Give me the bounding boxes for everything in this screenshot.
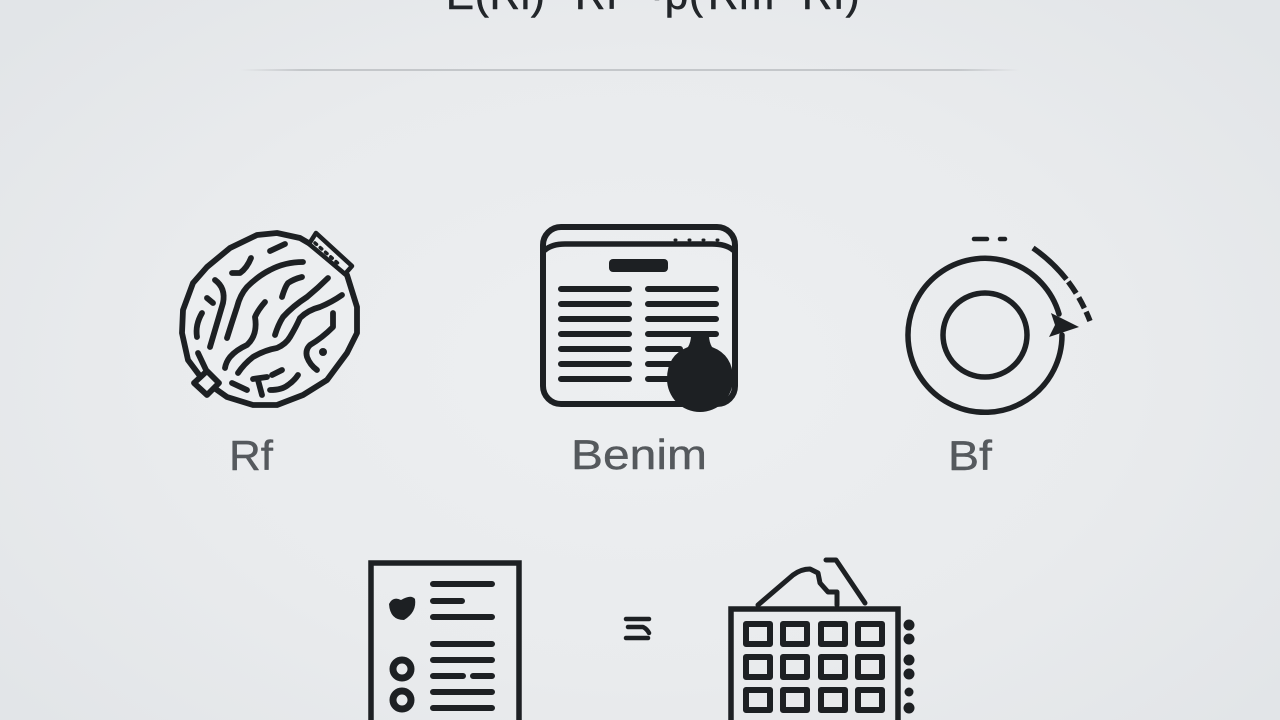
- icon: calendar building with mountain: [731, 560, 914, 720]
- label: Benim: Benim: [571, 431, 707, 478]
- icon: equals-like symbol: [626, 619, 649, 638]
- icon: concentric circles with cycle arrow: [908, 239, 1090, 412]
- icon: document window with flask: [543, 227, 735, 412]
- icon: checklist document: [371, 563, 519, 720]
- label: Rf: Rf: [229, 432, 273, 479]
- icon: brain: [182, 233, 357, 405]
- label: Bf: Bf: [948, 432, 992, 479]
